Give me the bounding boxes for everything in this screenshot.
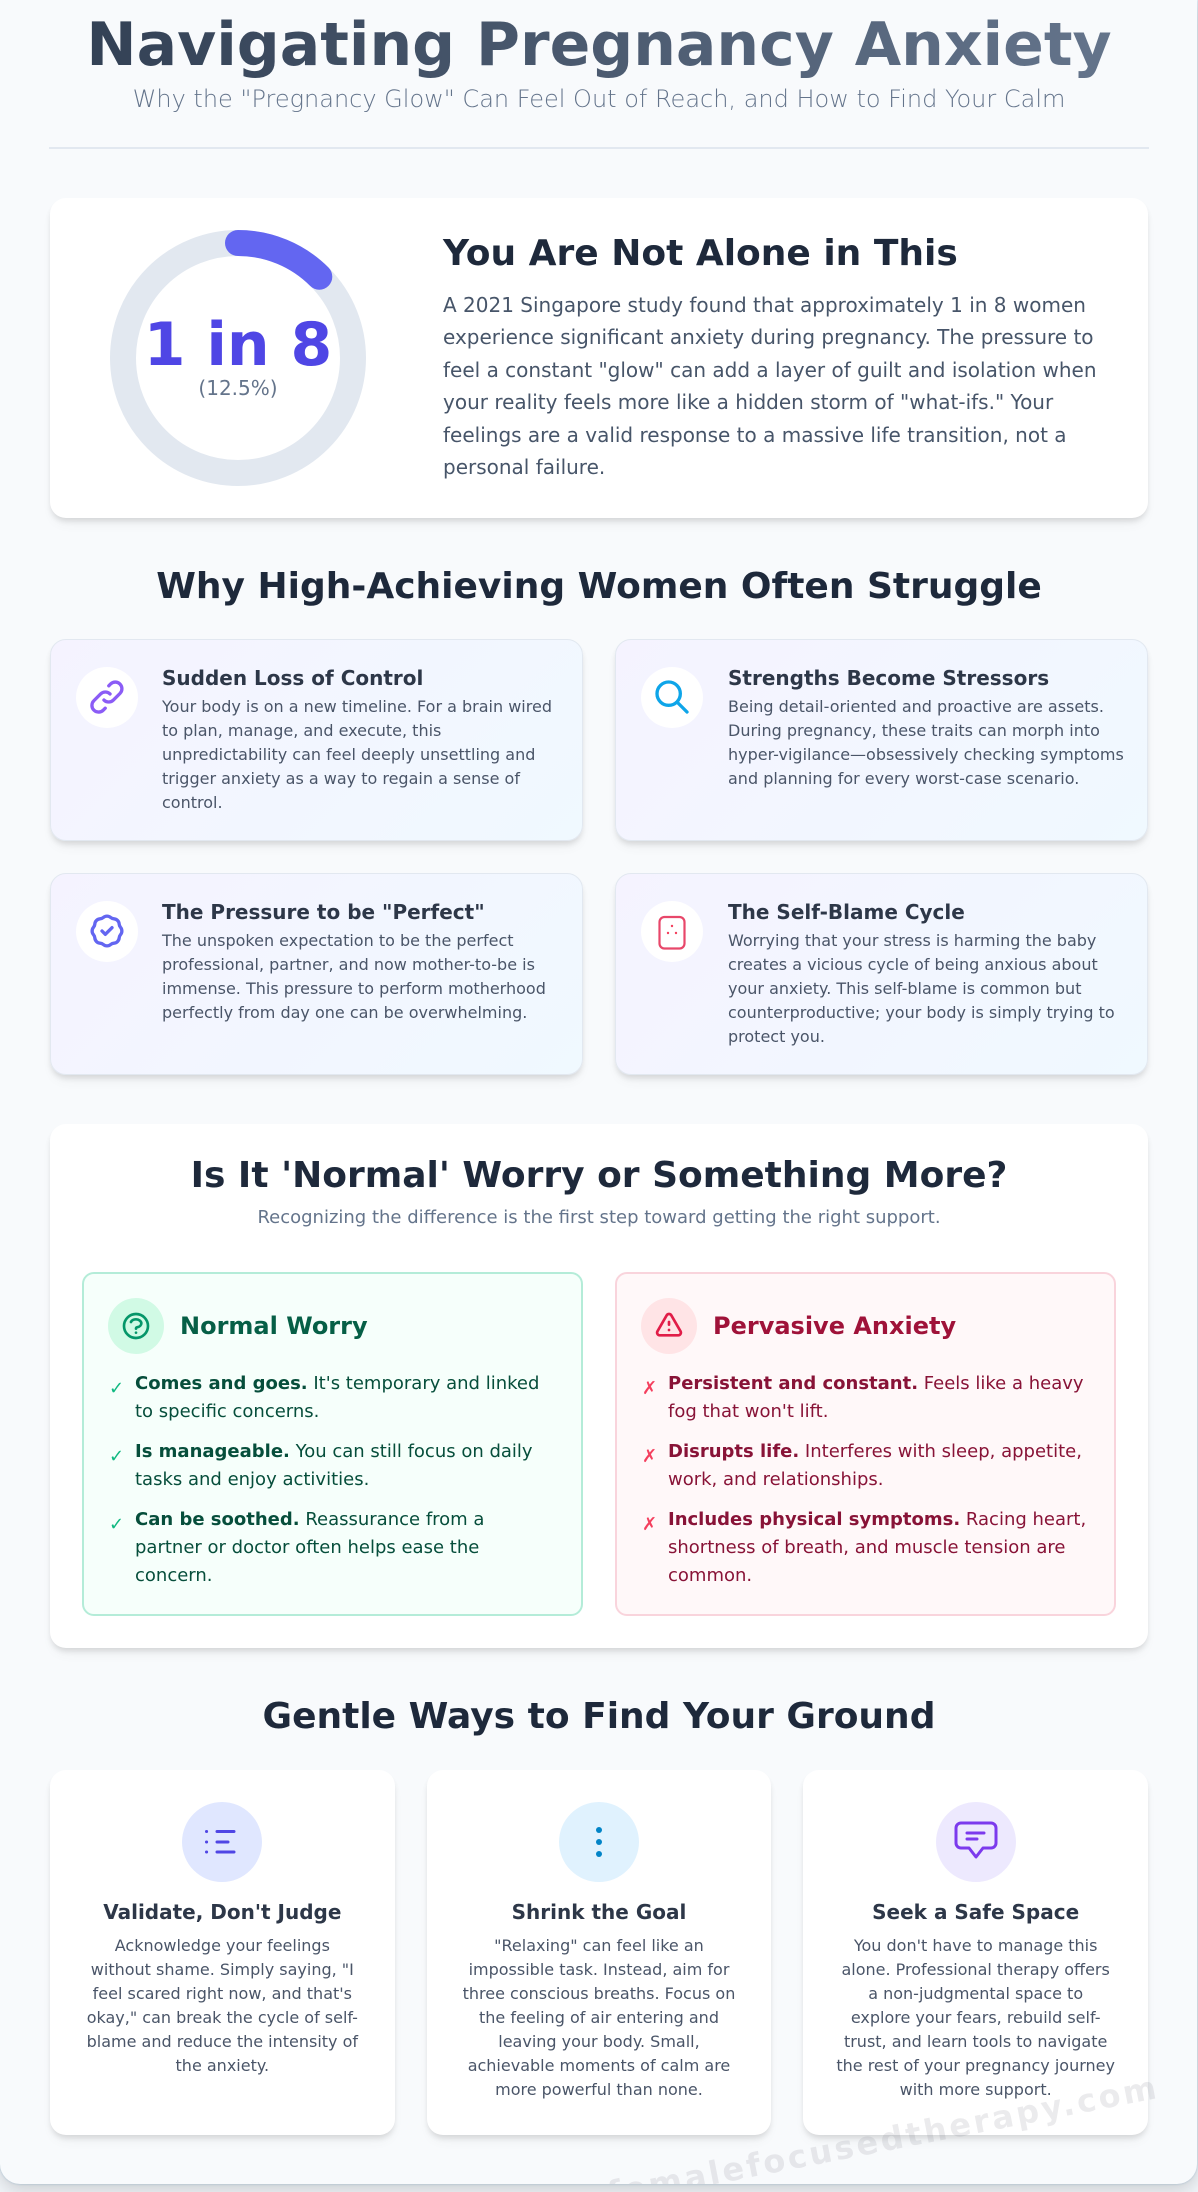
paragraph: feel a constant "glow" can add a layer of guilt and isolation when — [443, 358, 1097, 382]
list: Includes physical symptoms. Racing heart, — [668, 1509, 1086, 1530]
subtitle: Why the "Pregnancy Glow" Can Feel Out of Reach, and How to Find Your Calm — [133, 85, 1065, 113]
card text: The unspoken expectation to be the perfect — [162, 931, 514, 950]
card text: Worrying that your stress is harming the baby — [728, 931, 1096, 950]
list: fog that won't lift. — [668, 1401, 828, 1422]
donut chart: 1 in 8: 1 in 8 — [144, 310, 332, 380]
card title: Validate, Don't Judge — [103, 1900, 341, 1924]
card text — [728, 931, 1115, 1046]
card title: The Self-Blame Cycle — [728, 900, 965, 924]
card text: to plan, manage, and execute, this — [162, 721, 441, 740]
list: concern. — [135, 1565, 213, 1586]
donut chart: 1 in 8: (12.5%) — [198, 376, 278, 400]
list: ✓ — [109, 1514, 124, 1534]
card title: The Pressure to be "Perfect" — [162, 900, 485, 924]
panel: pervasive anxiety — [615, 1272, 1116, 1616]
card text — [728, 697, 1124, 788]
list: ✗ — [642, 1378, 657, 1398]
card text: control. — [162, 793, 223, 812]
list: ✓ — [109, 1446, 124, 1466]
card text: and planning for every worst-case scenario. — [728, 769, 1079, 788]
card text: blame and reduce the intensity of — [87, 2032, 358, 2051]
card text: During pregnancy, these traits can morph into — [728, 721, 1100, 740]
card title: Shrink the Goal — [512, 1900, 686, 1924]
card text — [87, 1936, 358, 2075]
list: partner or doctor often helps ease the — [135, 1537, 479, 1558]
card text: the rest of your pregnancy journey — [836, 2056, 1115, 2075]
icon: dots — [559, 1802, 639, 1882]
card text: without shame. Simply saying, "I — [91, 1960, 354, 1979]
card text — [836, 1936, 1115, 2099]
card title: Strengths Become Stressors — [728, 666, 1049, 690]
panel: normal worry vs anxiety — [50, 1124, 1148, 1648]
card text: impossible task. Instead, aim for — [469, 1960, 729, 1979]
heading: You Are Not Alone in This — [443, 233, 958, 274]
card text: explore your fears, rebuild self- — [851, 2008, 1100, 2027]
card text: "Relaxing" can feel like an — [494, 1936, 704, 1955]
card text: trigger anxiety as a way to regain a sense of — [162, 769, 520, 788]
list — [109, 1373, 539, 1586]
icon: warning — [641, 1298, 697, 1354]
list: shortness of breath, and muscle tension are — [668, 1537, 1066, 1558]
card text: perfectly from day one can be overwhelming. — [162, 1003, 527, 1022]
list: to specific concerns. — [135, 1401, 319, 1422]
list: Disrupts life. Interferes with sleep, appetite, — [668, 1441, 1082, 1462]
card text: the feeling of air entering and — [479, 2008, 719, 2027]
box heading: Pervasive Anxiety — [713, 1312, 956, 1340]
paragraph: A 2021 Singapore study found that approximately 1 in 8 women — [443, 293, 1086, 317]
card text: counterproductive; your body is simply trying to — [728, 1003, 1115, 1022]
card text: a non-judgmental space to — [868, 1984, 1083, 2003]
list: ✗ — [642, 1514, 657, 1534]
card text: more powerful than none. — [495, 2080, 703, 2099]
card text: hyper-vigilance—obsessively checking symptoms — [728, 745, 1124, 764]
card text: achievable moments of calm are — [468, 2056, 730, 2075]
panel: sudden loss of control — [50, 639, 583, 841]
card title: Sudden Loss of Control — [162, 666, 423, 690]
donut chart: 1 in 8 — [110, 230, 366, 486]
list: Comes and goes. It's temporary and linked — [135, 1373, 539, 1394]
paragraph: your reality feels more like a hidden storm of "what-ifs." Your — [443, 390, 1053, 414]
card text: Being detail-oriented and proactive are assets. — [728, 697, 1104, 716]
card text: unpredictability can feel deeply unsettling and — [162, 745, 535, 764]
icon: chat bubble — [936, 1802, 1016, 1882]
heading: why high-achieving: Why High-Achieving Women Often Struggle — [156, 566, 1042, 607]
card title: Seek a Safe Space — [872, 1900, 1079, 1924]
panel: pressure to be perfect — [50, 873, 583, 1075]
list: ✓ — [109, 1378, 124, 1398]
paragraph: experience significant anxiety during pregnancy. The pressure to — [443, 325, 1094, 349]
card text: feel scared right now, and that's — [93, 1984, 352, 2003]
icon: list — [182, 1802, 262, 1882]
card text: professional, partner, and now mother-to-be is — [162, 955, 535, 974]
panel: not alone — [50, 198, 1148, 518]
card text: the anxiety. — [176, 2056, 269, 2075]
panel: strengths become stressors — [615, 639, 1148, 841]
list: common. — [668, 1565, 752, 1586]
card text: Your body is on a new timeline. For a brain wired — [162, 697, 552, 716]
card text: creates a vicious cycle of being anxious about — [728, 955, 1098, 974]
paragraph: personal failure. — [443, 455, 605, 479]
list: Is manageable. You can still focus on daily — [135, 1441, 533, 1462]
icon: question — [108, 1298, 164, 1354]
card text: alone. Professional therapy offers — [841, 1960, 1110, 1979]
panel: normal worry — [82, 1272, 583, 1616]
card text: You don't have to manage this — [854, 1936, 1097, 1955]
heading: normal or more: Is It 'Normal' Worry or Something More? — [191, 1155, 1007, 1196]
icon: device with dots — [640, 901, 702, 962]
list: tasks and enjoy activities. — [135, 1469, 369, 1490]
panel: shrink the goal — [427, 1770, 771, 2135]
card text: three conscious breaths. Focus on — [463, 1984, 735, 2003]
card text — [463, 1936, 735, 2099]
title: Navigating Pregnancy Anxiety — [86, 10, 1112, 80]
icon: badge check — [76, 901, 138, 962]
subheading: Recognizing the difference is the first step toward getting the right support. — [257, 1207, 941, 1228]
card text: with more support. — [900, 2080, 1052, 2099]
list — [642, 1373, 1086, 1586]
card text: protect you. — [728, 1027, 825, 1046]
card text: immense. This pressure to perform motherhood — [162, 979, 546, 998]
icon: link — [76, 667, 138, 728]
panel: self-blame cycle — [615, 873, 1148, 1075]
list: Can be soothed. Reassurance from a — [135, 1509, 484, 1530]
list: Persistent and constant. Feels like a heavy — [668, 1373, 1084, 1394]
card text: trust, and learn tools to navigate — [844, 2032, 1107, 2051]
card text — [162, 931, 546, 1022]
card text: Acknowledge your feelings — [115, 1936, 330, 1955]
card text: leaving your body. Small, — [498, 2032, 700, 2051]
panel: seek a safe space — [803, 1770, 1148, 2135]
list: ✗ — [642, 1446, 657, 1466]
card text: okay," can break the cycle of self- — [87, 2008, 358, 2027]
paragraph: feelings are a valid response to a massive life transition, not a — [443, 423, 1067, 447]
icon: search — [640, 667, 702, 728]
card text — [162, 697, 552, 812]
heading: gentle ways: Gentle Ways to Find Your Ground — [263, 1696, 935, 1737]
card text: your anxiety. This self-blame is common but — [728, 979, 1081, 998]
paragraph — [443, 293, 1097, 479]
box heading: Normal Worry — [180, 1312, 368, 1340]
list: work, and relationships. — [668, 1469, 884, 1490]
panel: validate — [50, 1770, 395, 2135]
